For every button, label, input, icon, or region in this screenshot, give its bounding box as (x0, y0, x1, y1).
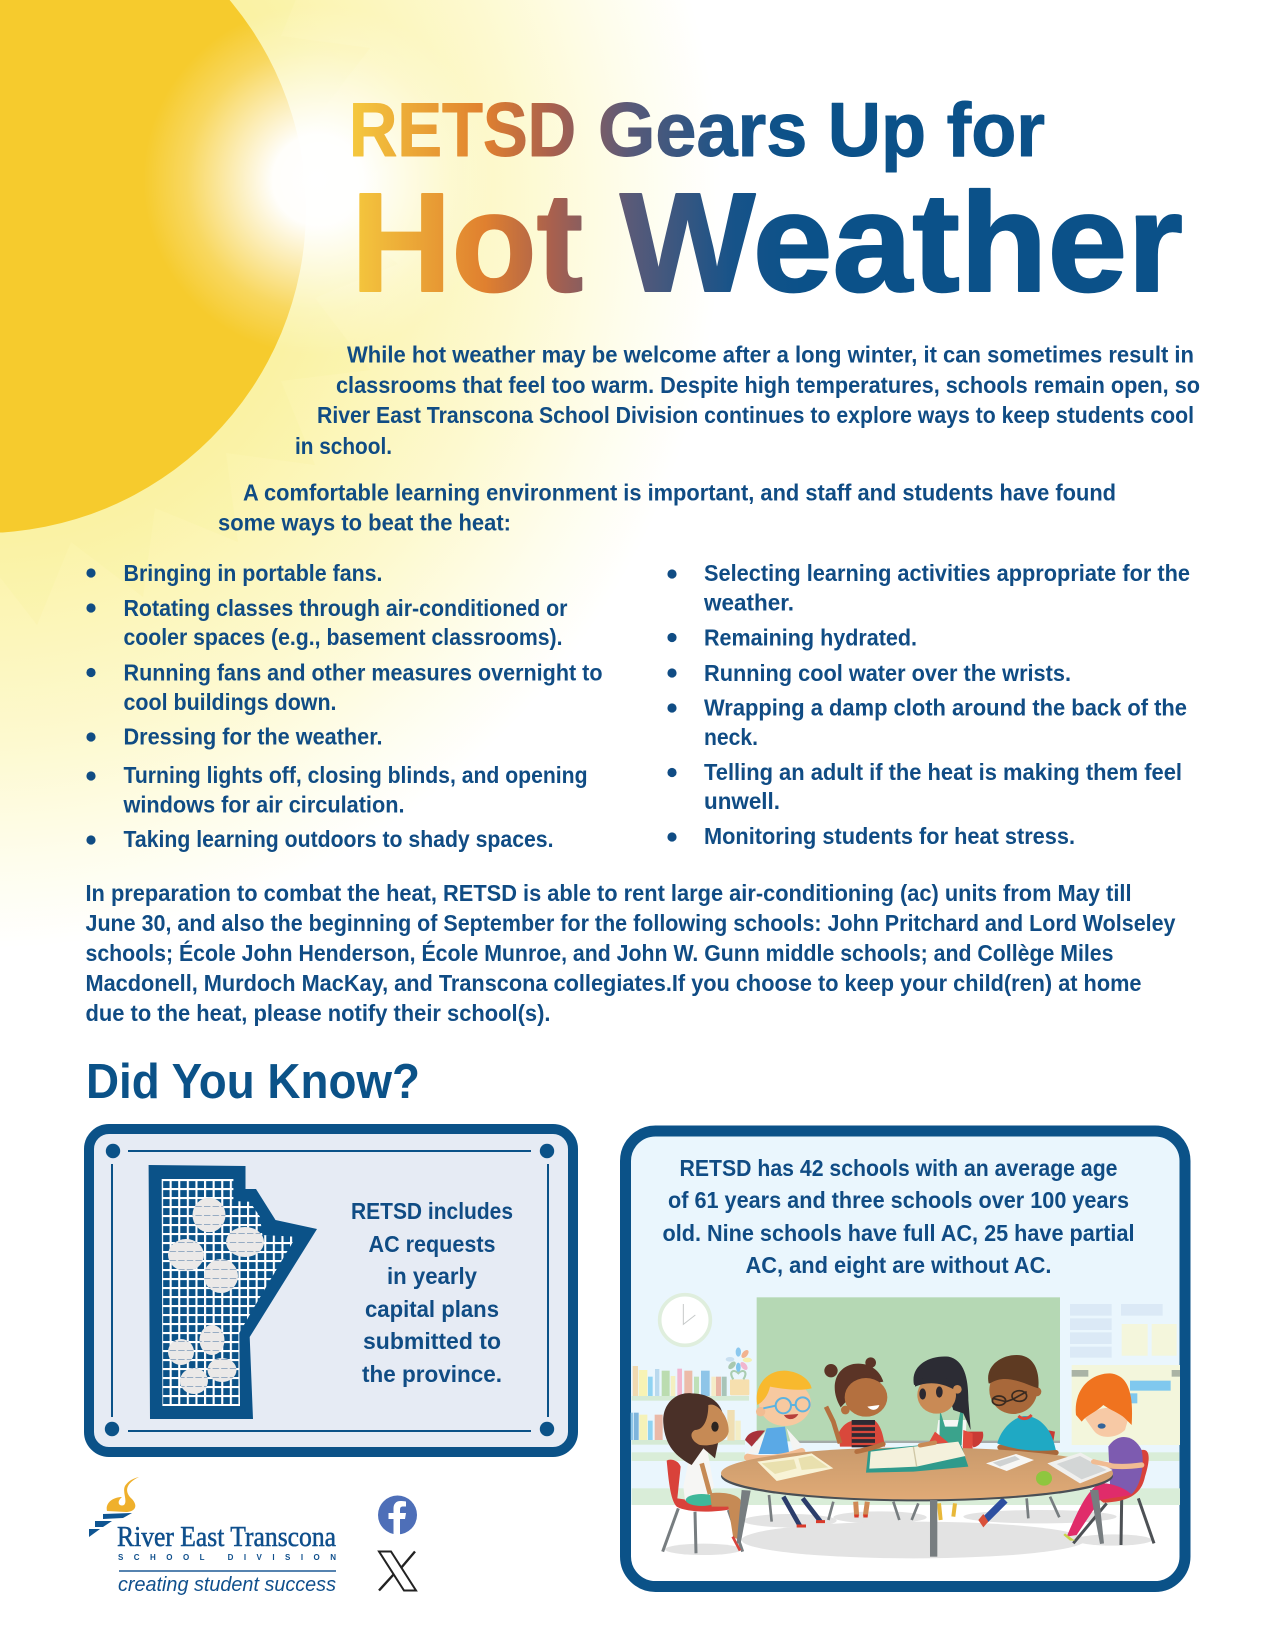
right bullet list: Selecting learning activities appropriate for the (704, 560, 1190, 586)
student: girl with dark hair on chair (663, 1393, 743, 1553)
plaque text: submitted to (363, 1328, 501, 1354)
left bullet list: Bringing in portable fans. (124, 560, 382, 586)
right bullet list (667, 560, 1190, 849)
torch stairs (89, 1513, 132, 1537)
plaque text (351, 1198, 513, 1387)
left bullet list (86, 560, 602, 852)
right bullet list: Telling an adult if the heat is making them feel (704, 759, 1182, 785)
left bullet list: Running fans and other measures overnight to (124, 660, 602, 686)
plaque text: AC requests (368, 1231, 496, 1257)
lead-in paragraph: some ways to beat the heat: (218, 510, 511, 536)
student: blond boy with blue glasses (745, 1371, 825, 1526)
back table legs (769, 1495, 1059, 1522)
intro paragraph: River East Transcona School Division continues to explore ways to keep students cool (317, 402, 1194, 428)
chalkboard (757, 1297, 1060, 1443)
preparation paragraph: In preparation to combat the heat, RETSD is able to rent large air-conditioning (ac) units from May till (86, 880, 1132, 906)
clock (660, 1295, 710, 1345)
icon: X (379, 1552, 416, 1590)
right bullet list: unwell. (704, 788, 780, 814)
panel: capital plans plaque (89, 1129, 573, 1452)
title: Hot (351, 163, 583, 321)
icon: Facebook (378, 1496, 417, 1534)
plaque text: capital plans (365, 1296, 499, 1322)
left bullet list: windows for air circulation. (123, 792, 404, 818)
intro paragraph: classrooms that feel too warm. Despite high temperatures, schools remain open, so (336, 372, 1200, 398)
title: RETSD (349, 88, 576, 173)
stats text (662, 1155, 1134, 1278)
lead-in paragraph: A comfortable learning environment is important, and staff and students have found (243, 480, 1116, 506)
student: girl with long black hair (913, 1356, 983, 1520)
classroom illustration (631, 1295, 1180, 1558)
logo: River East Transcona School Division: SCHOOL DIVISION (118, 1553, 336, 1562)
right bullet list: Wrapping a damp cloth around the back of the (704, 694, 1187, 720)
logo: River East Transcona School Division: River East Transcona (117, 1522, 337, 1553)
title: Gears Up for (598, 88, 1045, 173)
sun background (0, 0, 1275, 1000)
preparation paragraph: June 30, and also the beginning of September for the following schools: John Pritchard and Lord Wolseley (86, 910, 1176, 936)
wall charts (1070, 1304, 1180, 1445)
plaque text: the province. (362, 1361, 502, 1387)
stats text: of 61 years and three schools over 100 years (668, 1187, 1129, 1213)
plaque text: in yearly (387, 1263, 477, 1289)
bookshelves (631, 1366, 749, 1445)
panel: school stats with classroom illustration (626, 1131, 1185, 1586)
stats text: RETSD has 42 schools with an average age (680, 1155, 1118, 1181)
floor shadows (665, 1510, 1152, 1558)
right bullet list: Running cool water over the wrists. (704, 660, 1071, 686)
plaque text: RETSD includes (351, 1198, 513, 1224)
preparation paragraph (86, 880, 1176, 1026)
lead-in paragraph (218, 480, 1116, 536)
title (349, 88, 1183, 321)
logo: River East Transcona School Division: creating student success (118, 1574, 336, 1596)
left bullet list: Turning lights off, closing blinds, and opening (124, 762, 588, 788)
left bullet list: cool buildings down. (124, 689, 336, 715)
forearms on table (857, 1443, 1110, 1465)
open books and papers (757, 1442, 1113, 1486)
right bullet list: neck. (704, 724, 758, 750)
student: red-haired boy reading (1063, 1373, 1154, 1545)
left bullet list: Dressing for the weather. (124, 724, 382, 750)
intro paragraph: While hot weather may be welcome after a long winter, it can sometimes result in (347, 342, 1194, 368)
right bullet list: Remaining hydrated. (704, 624, 917, 650)
logo: River East Transcona School Division (89, 1477, 337, 1596)
torch flame (107, 1477, 139, 1512)
heading: Did You Know: Did You Know? (86, 1055, 420, 1109)
wall bands (632, 1452, 1180, 1505)
title: Weather (620, 163, 1183, 321)
preparation paragraph: due to the heat, please notify their school(s). (86, 1000, 550, 1026)
left bullet list: cooler spaces (e.g., basement classrooms). (124, 624, 562, 650)
intro paragraph: in school. (295, 433, 392, 459)
flower vase (726, 1347, 752, 1395)
round table (721, 1447, 1113, 1557)
preparation paragraph: Macdonell, Murdoch MacKay, and Transcona collegiates.If you choose to keep your child(ren) at home (86, 970, 1142, 996)
right bullet list: weather. (703, 590, 794, 616)
stats text: AC, and eight are without AC. (746, 1252, 1052, 1278)
intro paragraph (295, 342, 1200, 459)
right bullet list: Monitoring students for heat stress. (704, 823, 1075, 849)
student: girl with hair buns (824, 1357, 887, 1516)
map of Manitoba with school division blobs (149, 1165, 317, 1419)
stats text: old. Nine schools have full AC, 25 have partial (662, 1220, 1134, 1246)
left bullet list: Taking learning outdoors to shady spaces. (124, 826, 554, 852)
left bullet list: Rotating classes through air-conditioned or (124, 595, 568, 621)
preparation paragraph: schools; École John Henderson, École Munroe, and John W. Gunn middle schools; and Collège Miles (86, 939, 1114, 966)
student: boy with glasses in teal shirt (978, 1355, 1057, 1527)
